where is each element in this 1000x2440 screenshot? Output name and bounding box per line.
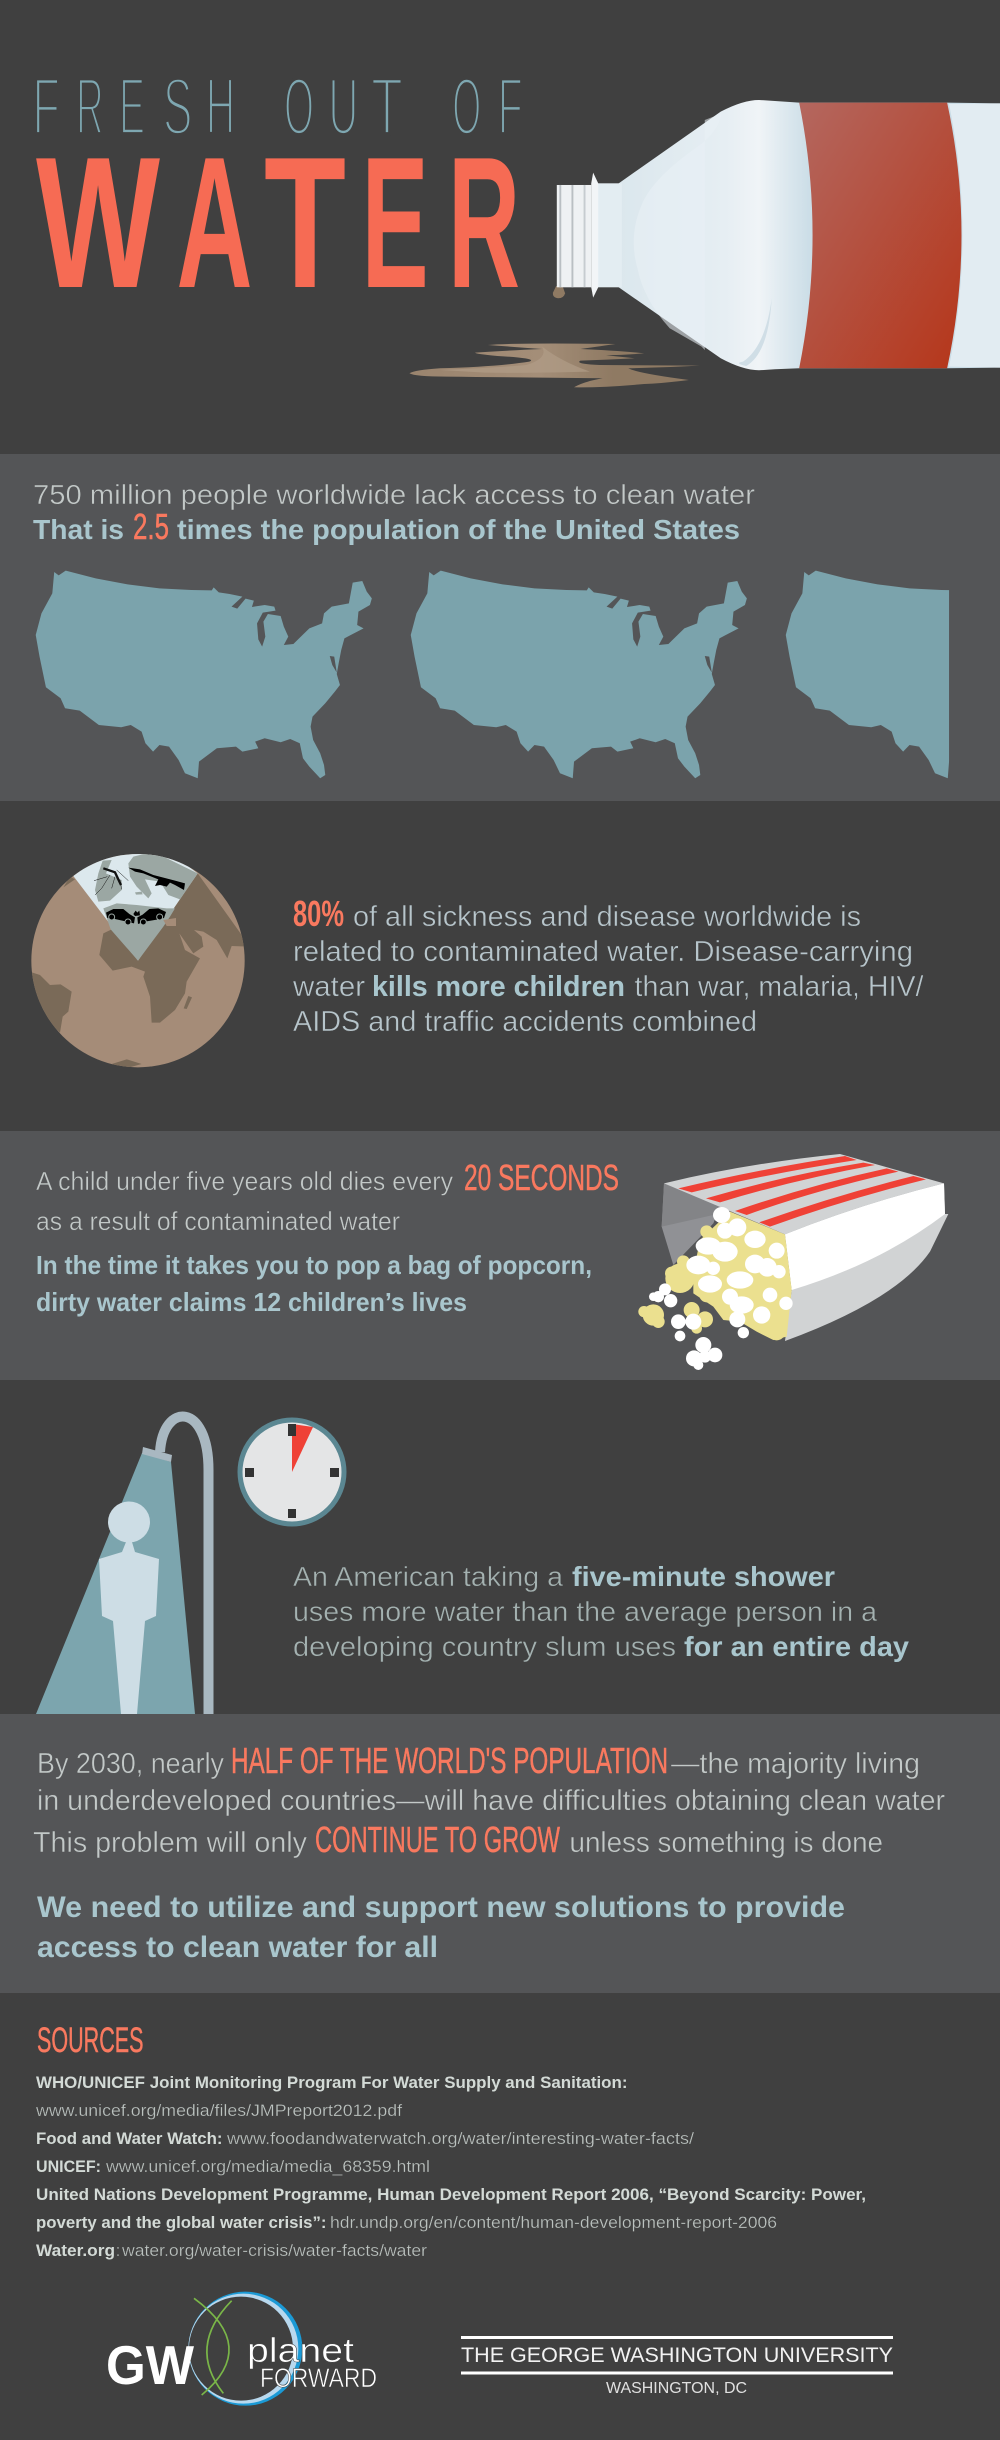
university name: THE GEORGE WASHINGTON UNIVERSITY	[461, 2344, 893, 2367]
text: 2.5 times population: times the population of the United States	[177, 514, 740, 545]
title: fresh out of: O	[284, 62, 314, 152]
panel: 750 million people	[0, 454, 1000, 801]
university location: WASHINGTON, DC	[606, 2380, 747, 2397]
text: shower paragraph: developing country slum uses	[293, 1631, 676, 1662]
text: half of the world's population: HALF OF THE WORLD'S POPULATION	[231, 1740, 668, 1781]
source list: Water.org	[36, 2242, 115, 2260]
bag interior	[662, 1183, 720, 1265]
wedge	[73, 850, 198, 961]
title: fresh out of: O	[452, 62, 481, 152]
icon: rifle	[128, 868, 185, 890]
shower head	[142, 1447, 172, 1462]
title: fresh out of: R	[76, 62, 104, 152]
text: half of the world's population	[33, 1740, 945, 1860]
water beam	[36, 1453, 195, 1714]
title: water: T	[264, 118, 346, 327]
text: shower paragraph	[293, 1561, 909, 1662]
logo ring	[188, 2292, 302, 2406]
title: fresh out of: H	[206, 62, 235, 152]
bottle label	[799, 103, 961, 368]
text: 2.5 times population: That is	[33, 514, 124, 545]
source list: :	[116, 2242, 120, 2260]
text: call to action: We need to utilize and support new solutions to provide	[37, 1891, 845, 1924]
bottle body	[619, 100, 1000, 370]
title: fresh out of: F	[498, 62, 523, 152]
text: child dies every 20 seconds: In the time it takes you to pop a bag of popcorn,	[36, 1250, 592, 1280]
text: 80 percent paragraph: related to contaminated water. Disease-carrying	[293, 936, 913, 968]
text: 80 percent paragraph: AIDS and traffic accidents combined	[293, 1006, 757, 1038]
panel: five-minute shower	[36, 1416, 909, 1714]
shower pipe	[160, 1416, 208, 1714]
source list: poverty and the global water crisis”:	[36, 2214, 326, 2232]
text: shower paragraph: uses more water than the average person in a	[293, 1596, 877, 1627]
logo: george washington university	[461, 2336, 893, 2397]
bottle neck	[557, 173, 622, 298]
panel: 20 seconds popcorn	[0, 1131, 1000, 1380]
source list: Food and Water Watch:	[36, 2130, 222, 2148]
header	[32, 62, 1000, 387]
title: fresh out of: U	[328, 62, 358, 152]
maps: united states silhouettes	[36, 571, 1000, 778]
bottle base shadow	[739, 298, 772, 366]
globe with pie wedge	[27, 850, 250, 1070]
logo text: planet: planet	[247, 2332, 355, 2370]
text: call to action	[37, 1891, 845, 1964]
text: 80 percent paragraph: than war, malaria, HIV/	[634, 971, 924, 1003]
title: water: A	[176, 118, 252, 327]
illustration: spilled water bottle	[409, 100, 1000, 387]
bag side	[785, 1183, 948, 1341]
text: child dies every 20 seconds: A child under five years old dies every	[36, 1166, 453, 1196]
bag top face with stripes	[664, 1154, 944, 1234]
logo text: GW: GW	[106, 2334, 194, 2396]
panel: by 2030	[0, 1714, 1000, 1993]
text: child dies every 20 seconds	[36, 1157, 619, 1317]
text: shower paragraph: An American taking a	[293, 1561, 563, 1592]
text: half of the world's population: unless something is done	[570, 1827, 883, 1859]
source list: www.unicef.org/media/files/JMPreport2012.pdf	[35, 2102, 402, 2120]
source list: UNICEF:	[36, 2158, 101, 2176]
icon: clock	[240, 1420, 344, 1524]
text: 80 percent paragraph: of all sickness and disease worldwide is	[353, 901, 861, 933]
heading: sources: SOURCES	[37, 2021, 144, 2060]
source list: www.unicef.org/media/media_68359.html	[105, 2158, 430, 2176]
text: shower paragraph: for an entire day	[684, 1631, 909, 1662]
logo text: forward: FORWARD	[260, 2363, 377, 2393]
panel: 80 percent disease	[27, 850, 924, 1070]
text: child dies every 20 seconds: as a result of contaminated water	[36, 1206, 400, 1236]
drip	[553, 286, 565, 298]
text: 80 percent paragraph: kills more children	[372, 971, 625, 1003]
source list	[35, 2074, 866, 2260]
title: fresh out of: F	[32, 62, 60, 152]
puddle	[409, 343, 700, 387]
source list: www.foodandwaterwatch.org/water/interesting-water-facts/	[226, 2130, 694, 2148]
title: fresh out of: S	[163, 62, 192, 152]
bottle rear	[949, 103, 1000, 368]
title: fresh out of: T	[371, 62, 402, 152]
text: 80 percent paragraph	[292, 893, 924, 1038]
text: call to action: access to clean water for all	[37, 1931, 438, 1964]
text: half of the world's population: in underdeveloped countries—will have difficulties obtaining clean water	[37, 1785, 945, 1817]
icon: crashed cars	[106, 908, 166, 925]
popcorn	[638, 1207, 793, 1370]
illustration: popcorn bag	[638, 1154, 948, 1370]
title: water: E	[362, 118, 429, 327]
text: 2.5 times population: 2.5	[133, 506, 169, 547]
person silhouette	[99, 1502, 159, 1714]
sources section	[35, 2021, 893, 2406]
text: child dies every 20 seconds: dirty water claims 12 children’s lives	[36, 1287, 467, 1317]
text: half of the world's population: —the majority living	[671, 1748, 920, 1780]
text: half of the world's population: CONTINUE TO GROW	[315, 1819, 560, 1860]
text: half of the world's population: This problem will only	[33, 1827, 307, 1859]
logo: gw planet forward	[106, 2292, 377, 2406]
title: water: W	[36, 118, 160, 327]
icon: mosquito	[94, 868, 128, 895]
text: half of the world's population: By 2030, nearly	[37, 1748, 224, 1780]
source list: United Nations Development Programme, Human Development Report 2006, “Beyond Scarcity: Power,	[36, 2186, 866, 2204]
source list: hdr.undp.org/en/content/human-development-report-2006	[330, 2214, 777, 2232]
text: child dies every 20 seconds: 20 SECONDS	[464, 1157, 619, 1198]
title: fresh out of: E	[119, 62, 145, 152]
source list: water.org/water-crisis/water-facts/water	[121, 2242, 428, 2260]
text: 750 million: 750 million people worldwide lack access to clean water	[33, 479, 755, 510]
source list: WHO/UNICEF Joint Monitoring Program For Water Supply and Sanitation:	[36, 2074, 628, 2092]
bottle shoulder highlight	[634, 113, 722, 350]
text: shower paragraph: five-minute shower	[572, 1561, 835, 1592]
text: 80 percent paragraph: 80%	[293, 893, 344, 934]
illustration: person in shower	[36, 1416, 208, 1714]
title: water: R	[448, 118, 520, 327]
text: 80 percent paragraph: water	[292, 971, 365, 1003]
